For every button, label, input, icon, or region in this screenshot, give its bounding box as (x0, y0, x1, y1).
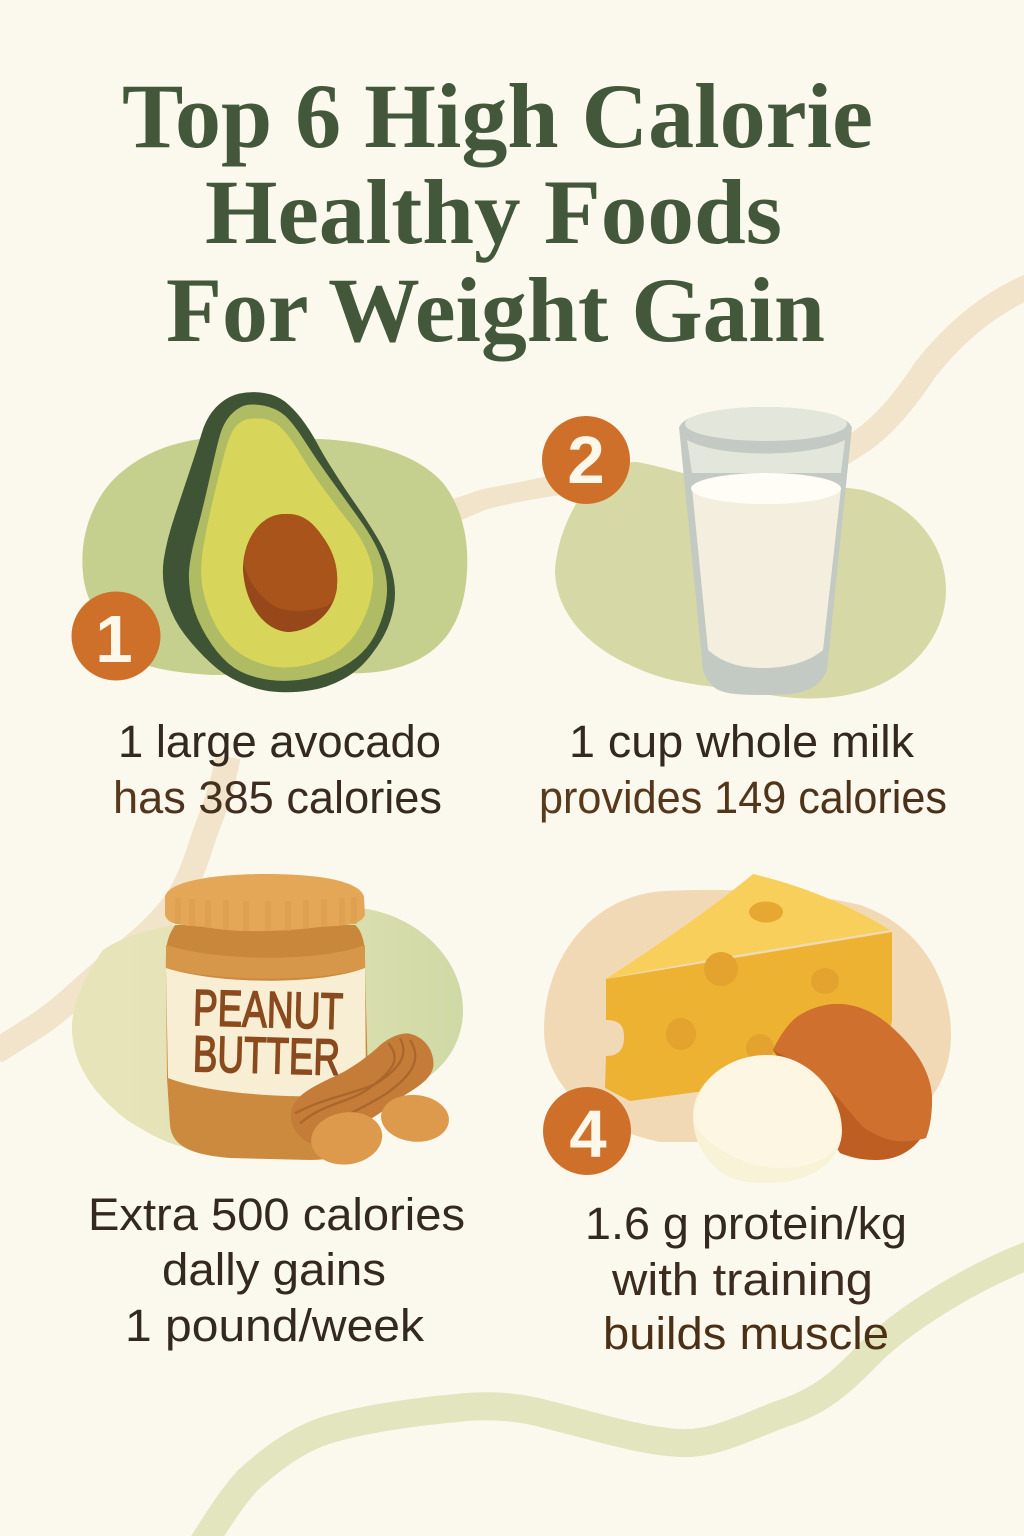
blob: green backdrop (555, 462, 946, 698)
caption: milk: provides 149 calories (539, 772, 947, 823)
caption: milk: 1 cup whole milk (569, 716, 915, 767)
icon: white egg (693, 1055, 842, 1183)
caption: calorie surplus (88, 1189, 465, 1351)
caption: milk (539, 716, 947, 823)
icon: jar (165, 874, 368, 1160)
badge: number 4 (543, 1087, 631, 1175)
title: Healthy Foods (205, 161, 782, 263)
icon: cheese wedge (605, 874, 892, 1101)
blob: green backdrop (72, 905, 463, 1151)
blob: green backdrop (82, 439, 467, 675)
caption: protein: builds muscle (603, 1308, 889, 1359)
caption: avocado: has 385 calories (113, 772, 442, 823)
icon: glass of milk (679, 407, 852, 695)
badge: number 1: 1 (95, 602, 133, 677)
panel: cheese and eggs (543, 874, 951, 1183)
jar label text (192, 979, 344, 1086)
icon: avocado (163, 392, 395, 692)
badge: number 4: 4 (569, 1097, 607, 1172)
caption: protein (585, 1198, 907, 1359)
jar label text: PEANUT (192, 979, 344, 1040)
jar label text: BUTTER (192, 1025, 341, 1086)
decorative beige wave: lower left (0, 757, 228, 1052)
decorative beige wave: upper right (835, 285, 1024, 458)
panel: milk (542, 407, 946, 698)
badge: number 1 (72, 592, 160, 680)
caption: avocado: 1 large avocado (118, 716, 441, 767)
icon: peanut (291, 1033, 451, 1169)
blob: peach backdrop (544, 890, 951, 1142)
icon: jar lid (165, 874, 365, 931)
icon: avocado pit (243, 514, 337, 632)
decorative beige wave: middle (450, 473, 560, 525)
caption: protein: 1.6 g protein/kg (585, 1198, 907, 1249)
decorative green wave (202, 1254, 1024, 1536)
caption: calorie surplus: Extra 500 calories (88, 1189, 465, 1240)
title: Top 6 High Calorie (122, 65, 873, 167)
badge: number 2 (542, 416, 630, 504)
caption: avocado (113, 716, 442, 823)
title (122, 65, 873, 361)
caption: calorie surplus: dally gains (162, 1244, 386, 1295)
caption: calorie surplus: 1 pound/week (125, 1300, 425, 1351)
icon: brown egg (773, 1004, 932, 1160)
caption: protein: with training (611, 1254, 873, 1305)
badge: number 2: 2 (567, 423, 605, 498)
title: For Weight Gain (166, 259, 825, 361)
panel: avocado (72, 392, 467, 692)
panel: peanut butter (72, 874, 463, 1169)
